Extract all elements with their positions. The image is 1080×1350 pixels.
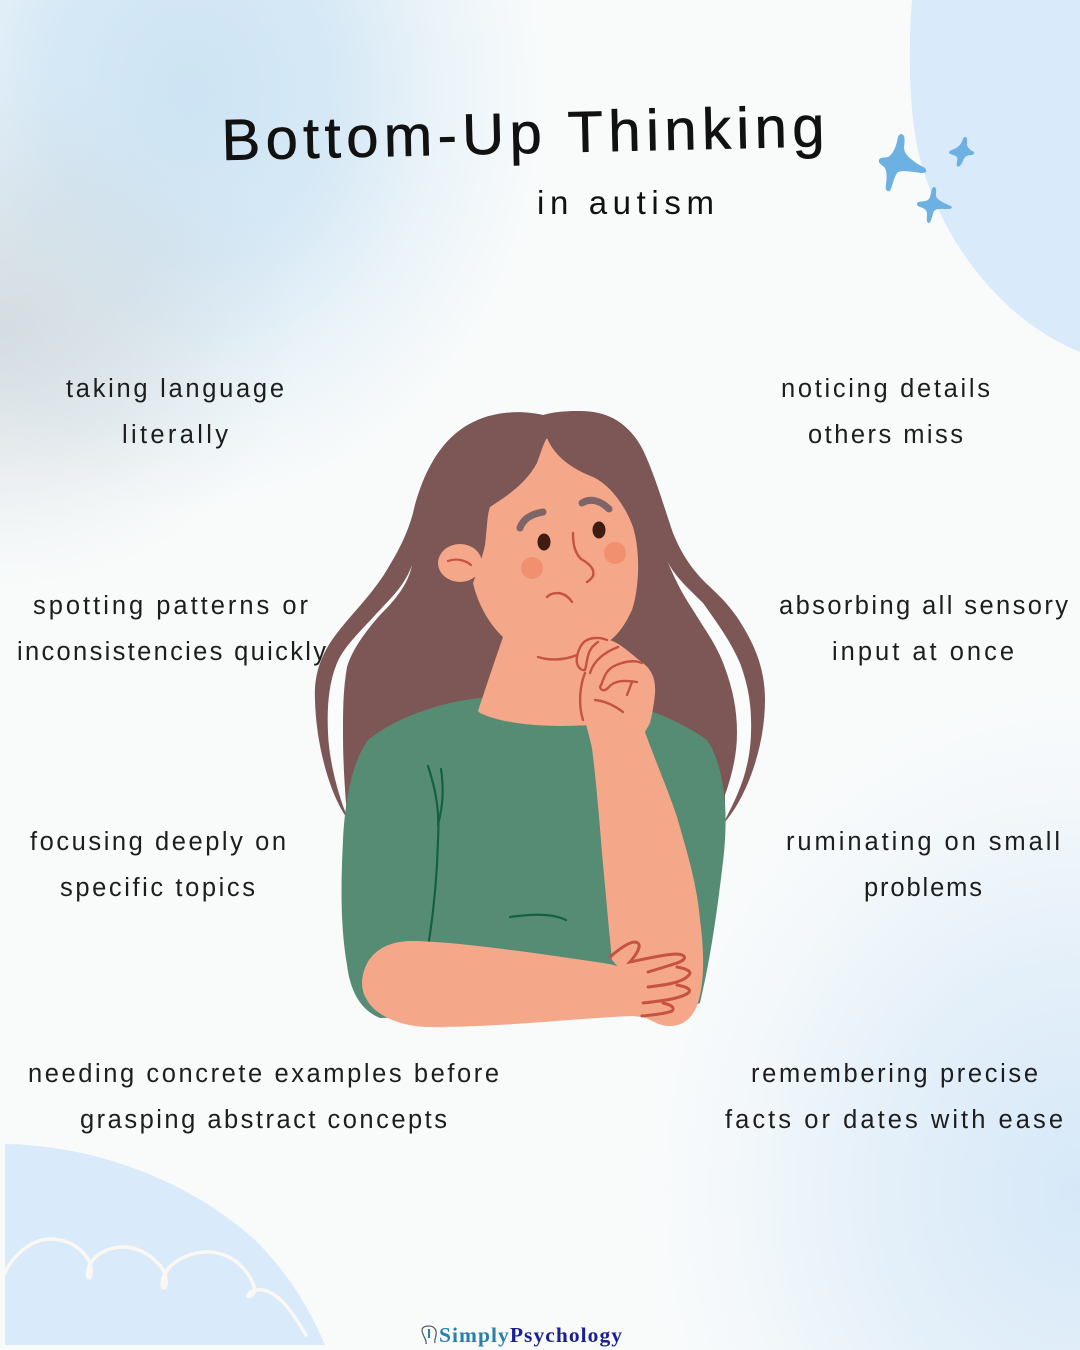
shirt creases [428,766,566,941]
corner shape: top right [910,0,1080,352]
label: ruminating on small problems [786,828,1060,902]
label: remembering facts: facts or dates with ease [725,1106,1063,1134]
hair gap right [667,560,751,820]
title: Bottom-Up Thinking [221,94,825,173]
label: needing concrete examples: needing concrete examples before [28,1060,499,1088]
label: remembering facts: remembering precise [751,1060,1038,1088]
label: remembering facts [725,1060,1063,1134]
label: spotting patterns [17,592,326,666]
label: focusing deeply [30,828,286,902]
label: focusing deeply: focusing deeply on [30,828,286,856]
label: focusing deeply: specific topics [60,874,255,902]
label: spotting patterns: spotting patterns or [33,592,308,620]
label: absorbing sensory input: absorbing all sensory [779,592,1068,620]
raised arm and fist [538,638,703,1026]
label: taking language literally [66,375,284,449]
label: spotting patterns: inconsistencies quickly [17,638,326,666]
label: noticing details others miss: noticing details [781,375,990,403]
label: needing concrete examples: grasping abstract concepts [80,1106,447,1134]
label: noticing details others miss: others miss [808,421,963,449]
nose and mouth [547,533,593,602]
logo wordmark: SimplyPsychology [439,1323,622,1347]
hair [315,411,765,822]
forearm and hand [362,941,690,1027]
label: ruminating on small problems: ruminating on small [786,828,1060,856]
face and neck [473,438,638,726]
hair gap left [328,565,412,816]
shirt [342,698,726,1018]
icon: sparkles [879,134,974,223]
eyebrows [520,500,609,528]
eyes [538,522,606,550]
label: taking language literally: literally [122,421,228,449]
cheeks [521,542,626,579]
label: absorbing sensory input [779,592,1068,666]
label: absorbing sensory input: input at once [832,638,1014,666]
label: taking language literally: taking language [66,375,284,403]
label: ruminating on small problems: problems [864,874,982,902]
label: noticing details others miss [781,375,990,449]
corner shape: bottom left with cloud line [3,1144,325,1345]
icon: logo head [422,1326,436,1344]
ear [438,544,482,582]
subtitle: in autism [537,184,714,221]
label: needing concrete examples [28,1060,499,1134]
woman illustration [315,411,765,1027]
